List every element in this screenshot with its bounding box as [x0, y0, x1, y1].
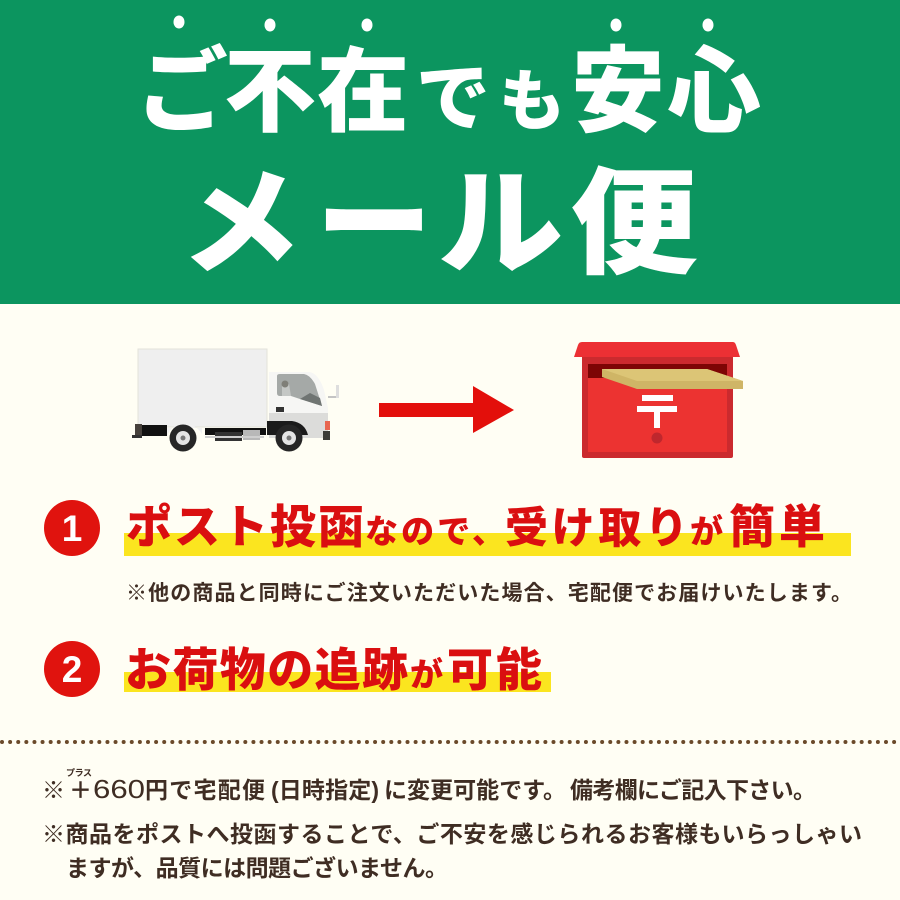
title banner — [0, 0, 900, 304]
heading 1: が — [690, 513, 723, 550]
footnote: plus 660 yen: 660 — [93, 775, 145, 804]
heading 1: 簡単 — [729, 501, 825, 553]
heading 2: が — [410, 656, 443, 693]
note under point 1: ※他の商品と同時にご注文いただいた場合、宅配便でお届けいたします。 — [126, 581, 852, 605]
wheels — [170, 424, 196, 452]
cab — [269, 372, 328, 438]
footnote: plus 660 yen: 備考欄にご記入下さい。 — [570, 777, 816, 803]
icon: delivery truck — [132, 349, 339, 452]
number badge 2: 2 — [62, 649, 82, 690]
title line 1: 在 — [317, 42, 409, 144]
title line 1: 安 — [571, 39, 665, 144]
point 2 — [44, 641, 551, 697]
footnotes — [42, 768, 862, 881]
title line 2: ー — [316, 159, 432, 289]
title line 1: も — [499, 64, 565, 138]
heading 1: ポスト投函 — [126, 501, 364, 553]
number badge 1 — [44, 500, 100, 556]
footnote: plus 660 yen: ※＋ — [42, 777, 92, 803]
rear light and bumper — [323, 431, 330, 440]
heading 2: 可能 — [447, 644, 542, 696]
mirror — [328, 386, 337, 397]
number badge 2 — [44, 641, 100, 697]
icon: post box with parcel — [574, 342, 743, 458]
title line 1: ご — [136, 42, 228, 144]
emphasis dots — [174, 16, 714, 32]
footnote: plus 660 yen: (日時指定) — [271, 777, 379, 803]
title line 2: 便 — [570, 159, 698, 289]
title line 2 — [180, 159, 698, 289]
point 1 — [44, 500, 851, 556]
dotted divider — [2, 740, 900, 744]
title line 1: 不 — [224, 42, 316, 144]
parcel — [602, 369, 743, 389]
heading 2: お荷物の追跡 — [125, 644, 408, 696]
footnote: plus 660 yen: プラス — [66, 768, 92, 778]
title line 2: ル — [438, 159, 563, 289]
heading 1: なので、 — [365, 513, 505, 550]
cab window — [277, 374, 322, 406]
title line 1: 心 — [667, 39, 761, 144]
footnote: plus 660 yen: 円で宅配便 — [145, 777, 265, 803]
highlight bar 2 — [124, 672, 551, 692]
highlight bar 1 — [124, 533, 851, 556]
heading 1: 受け取り — [505, 505, 688, 553]
number badge 1: 1 — [62, 508, 82, 549]
footnote: post delivery quality — [42, 821, 862, 881]
footnote: post delivery quality: ますが、品質には問題ございません。 — [66, 855, 448, 881]
title line 2: メ — [180, 160, 302, 289]
title line 1 — [136, 39, 761, 144]
title line 1: で — [416, 57, 490, 140]
arrow — [379, 386, 514, 433]
footnote: post delivery quality: ※商品をポストへ投函することで、ご不安を感じられるお客様もいらっしゃい — [42, 821, 862, 847]
footnote: plus 660 yen: に変更可能です。 — [384, 777, 566, 803]
cargo box — [138, 349, 267, 427]
footnote: plus 660 yen — [42, 768, 816, 804]
postal mark — [642, 395, 673, 401]
chassis — [135, 424, 142, 437]
